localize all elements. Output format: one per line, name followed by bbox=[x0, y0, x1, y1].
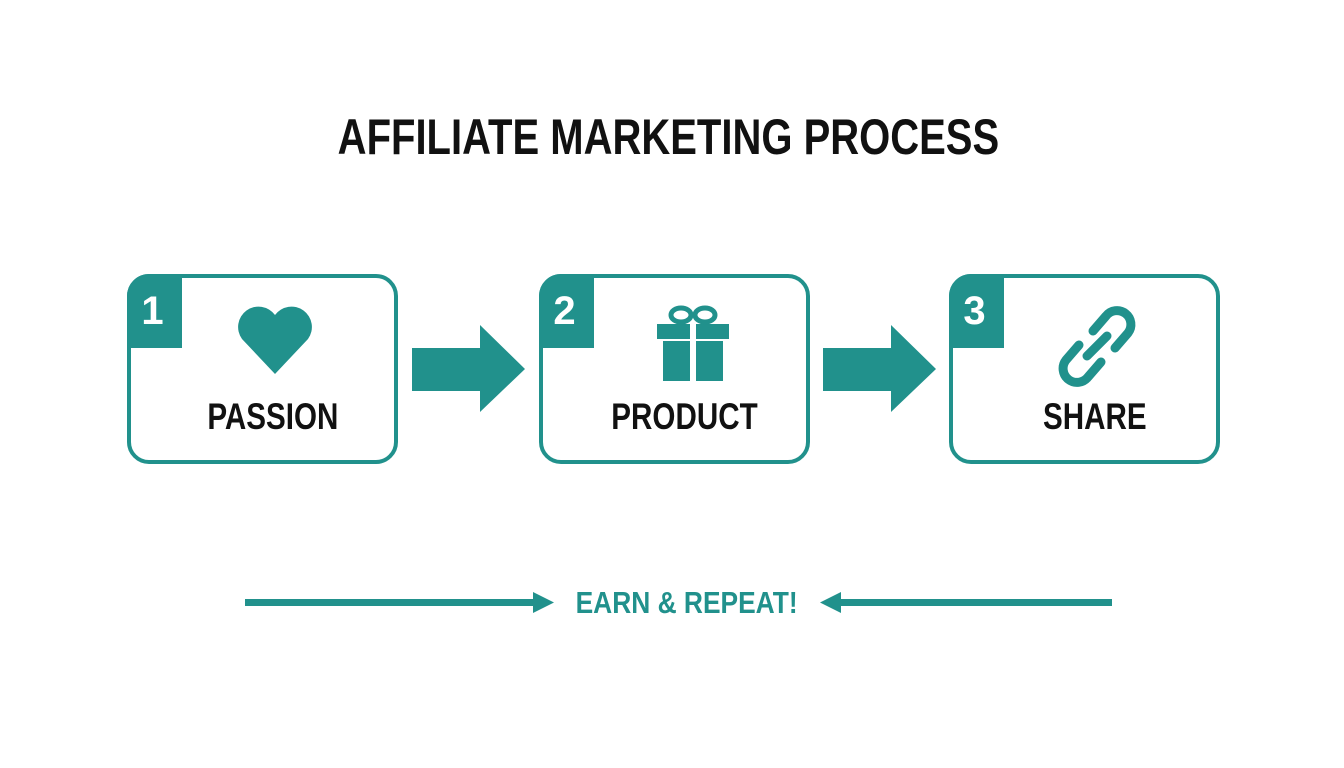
badge 1: 1 bbox=[141, 289, 164, 333]
badge 2 bbox=[539, 274, 594, 348]
left arrow line bbox=[245, 592, 554, 613]
label: PASSION bbox=[207, 396, 338, 437]
icon: gift bbox=[657, 306, 729, 381]
title: AFFILIATE MARKETING PROCESS bbox=[337, 109, 999, 165]
icon: link bbox=[1058, 306, 1136, 387]
arrow 2 bbox=[823, 325, 936, 412]
arrow 1 bbox=[412, 325, 525, 412]
badge 1 bbox=[127, 274, 182, 348]
label: SHARE bbox=[1043, 396, 1146, 437]
badge 3: 3 bbox=[963, 289, 986, 333]
right arrow line bbox=[820, 592, 1112, 613]
earn & repeat text: EARN & REPEAT! bbox=[576, 585, 798, 620]
badge 2: 2 bbox=[553, 289, 576, 333]
panel: passion bbox=[127, 274, 398, 464]
badge 3 bbox=[949, 274, 1004, 348]
panel: product bbox=[539, 274, 810, 464]
panel: share bbox=[949, 274, 1220, 464]
label: PRODUCT bbox=[611, 396, 758, 437]
icon: heart bbox=[238, 306, 312, 374]
